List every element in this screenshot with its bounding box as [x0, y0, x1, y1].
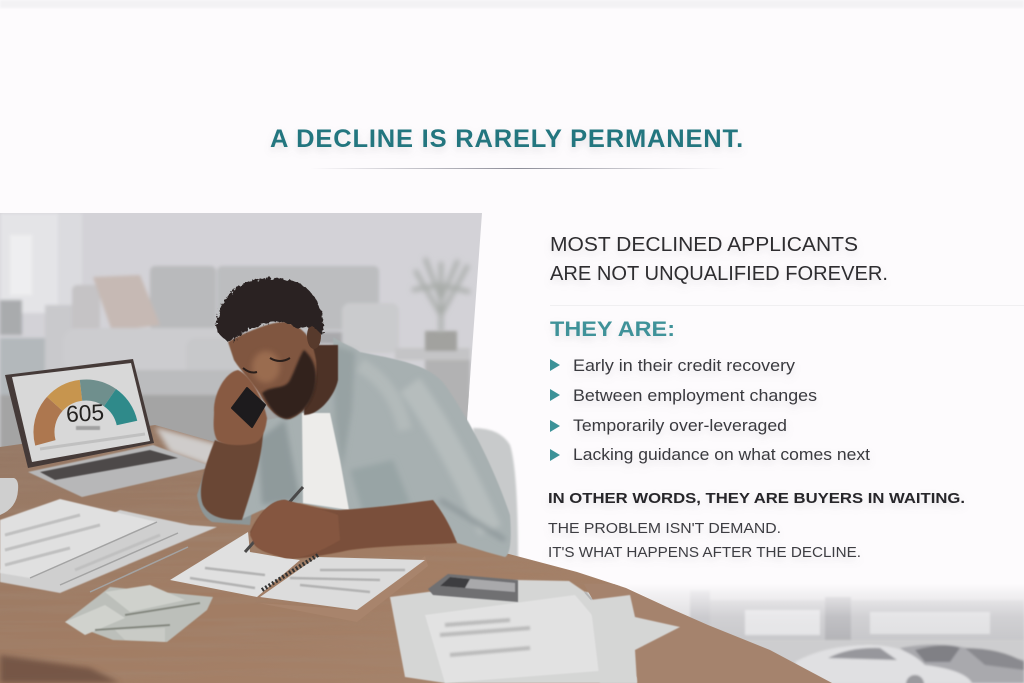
photo background: living room	[0, 213, 482, 473]
hand holding phone	[214, 370, 267, 445]
score: 605	[65, 399, 105, 427]
shirt and torso	[240, 337, 511, 557]
laptop with credit score gauge	[5, 359, 213, 497]
neck	[304, 345, 338, 415]
closing lines: IT'S WHAT HAPPENS AFTER THE DECLINE.	[548, 544, 861, 561]
table wood grain and front edge	[0, 426, 214, 683]
phone	[232, 388, 265, 427]
eyes	[243, 358, 290, 372]
table	[0, 425, 832, 683]
ear	[307, 323, 321, 349]
plant	[412, 258, 470, 332]
headline: ARE NOT UNQUALIFIED FOREVER.	[550, 263, 888, 285]
photo: man reviewing credit at table	[0, 213, 840, 683]
subheading: THEY ARE:	[550, 317, 675, 341]
cheek highlight	[252, 351, 280, 383]
shirt shading	[258, 345, 505, 540]
writing hand	[250, 500, 340, 558]
coffee cup	[0, 478, 18, 515]
list items: Early in their credit recovery	[573, 356, 796, 375]
car dealership lot background	[588, 584, 1024, 683]
headline	[550, 234, 888, 285]
title: A DECLINE IS RARELY PERMANENT.	[270, 125, 744, 153]
headline: MOST DECLINED APPLICANTS	[550, 234, 858, 256]
bold takeaway: IN OTHER WORDS, THEY ARE BUYERS IN WAITING.	[548, 490, 965, 507]
closing lines: THE PROBLEM ISN'T DEMAND.	[548, 520, 781, 537]
list items: Between employment changes	[573, 386, 817, 405]
undershirt	[302, 413, 349, 510]
face	[228, 322, 316, 419]
list items: Lacking guidance on what comes next	[573, 445, 870, 464]
writing forearm	[250, 500, 457, 558]
cash pile	[65, 585, 213, 642]
parked cars	[900, 644, 1024, 683]
list items: Temporarily over-leveraged	[573, 416, 787, 435]
beard	[262, 350, 316, 419]
pen	[245, 487, 303, 552]
text panel	[548, 234, 1024, 561]
hair	[216, 278, 324, 342]
papers on table, right	[390, 580, 680, 683]
list items	[573, 356, 870, 464]
bullet icons	[550, 359, 560, 461]
calculator	[428, 574, 518, 602]
left forearm	[201, 433, 263, 520]
list: reasons	[550, 356, 870, 464]
notebook	[170, 532, 428, 622]
chair	[473, 428, 518, 560]
left sleeve cuff	[197, 460, 258, 525]
closing lines	[548, 520, 861, 561]
papers on table, left	[0, 499, 217, 593]
gauge	[44, 390, 127, 443]
